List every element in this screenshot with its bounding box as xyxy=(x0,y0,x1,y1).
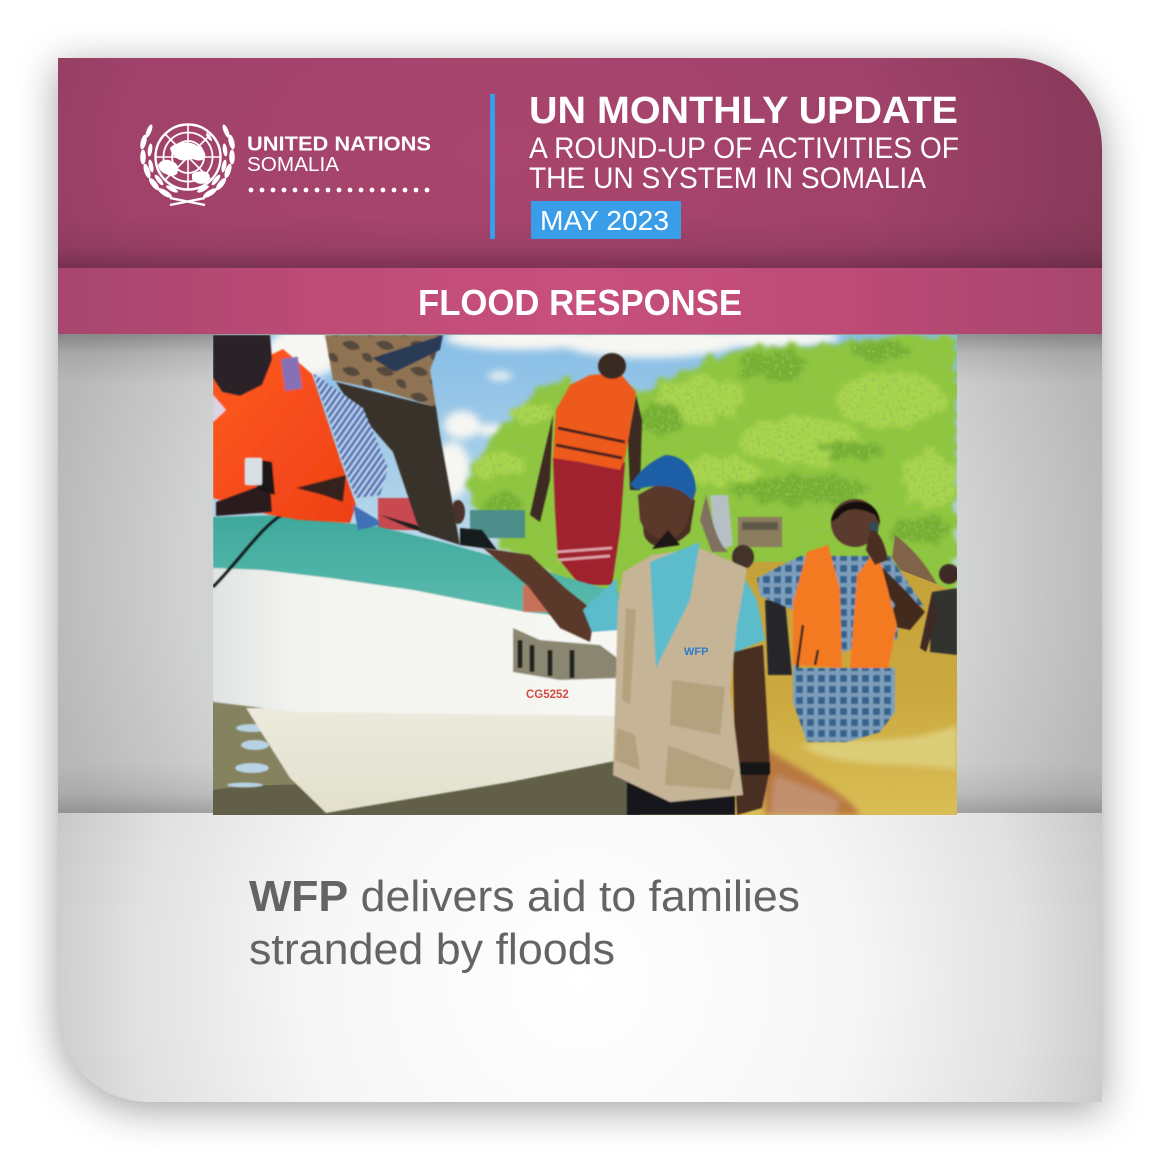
water xyxy=(213,562,957,815)
logo: UN Somalia xyxy=(139,124,431,205)
bystanders in the water xyxy=(732,545,792,675)
panel: section band xyxy=(58,268,1102,334)
panel: caption area xyxy=(58,813,1102,1102)
caption: stranded by floods xyxy=(249,925,615,974)
person: man in orange life vest on boat xyxy=(213,335,388,530)
date badge xyxy=(531,201,681,239)
header divider xyxy=(490,94,495,239)
person: child in water xyxy=(920,564,959,655)
subtitle: A ROUND-UP OF ACTIVITIES OF xyxy=(529,132,959,165)
subtitle xyxy=(529,132,959,195)
logo dotted rule xyxy=(249,188,429,192)
person: man standing on boat xyxy=(325,335,460,545)
trees xyxy=(466,335,957,610)
icon: UN emblem xyxy=(139,124,236,205)
person: man in plaid on phone xyxy=(757,499,925,742)
title: UN MONTHLY UPDATE xyxy=(529,90,958,132)
panel: photo backdrop xyxy=(58,334,1102,813)
sky and clouds xyxy=(213,326,957,595)
person: man seen from behind xyxy=(530,353,642,585)
background trunks, building and bystanders xyxy=(378,495,940,590)
right wreath xyxy=(196,124,236,200)
subtitle: THE UN SYSTEM IN SOMALIA xyxy=(529,162,926,195)
caption: WFP delivers aid to families xyxy=(249,872,800,921)
left wreath xyxy=(139,124,179,200)
vest logo: WFP xyxy=(684,646,708,658)
caption xyxy=(249,872,800,974)
boat registration: CG5252 xyxy=(526,689,569,701)
boat xyxy=(213,513,640,813)
person: WFP staff member xyxy=(483,455,770,815)
section heading: FLOOD RESPONSE xyxy=(418,282,742,323)
date badge: MAY 2023 xyxy=(540,205,669,236)
photo: WFP staff with boat in flood water xyxy=(213,326,959,815)
logo wordmark: Somalia: SOMALIA xyxy=(247,154,340,176)
logo wordmark: United Nations: UNITED NATIONS xyxy=(247,132,431,156)
panel: header xyxy=(58,58,1102,268)
person: seated on boat xyxy=(380,500,497,550)
